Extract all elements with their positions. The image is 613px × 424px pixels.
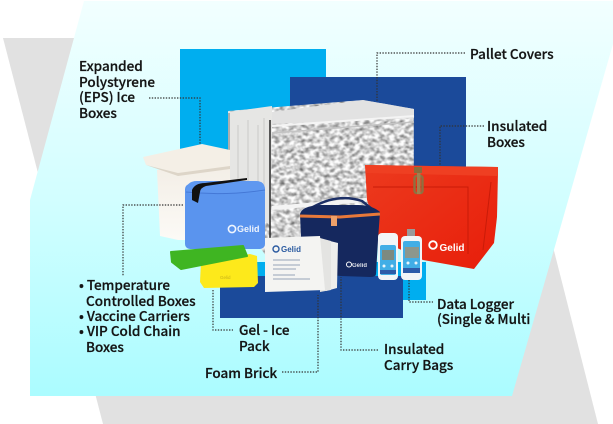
label: temperature controlled list: • VIP Cold Chain: [79, 320, 181, 340]
label: data logger: Data Logger: [437, 293, 514, 313]
icon: data loggers: [378, 229, 422, 280]
leader: carry bags: [341, 277, 378, 350]
label: insulated boxes: Boxes: [487, 131, 525, 151]
leader: EPS: [149, 98, 200, 144]
leader: insulated boxes: [440, 126, 484, 165]
icon: blue temperature controlled box: [185, 178, 265, 249]
icon: insulated carry bag: [300, 198, 380, 277]
label: insulated carry bags: Insulated: [384, 338, 444, 358]
label: temperature controlled list: • Vaccine Carriers: [79, 305, 190, 325]
icon: gel ice packs: [265, 236, 338, 292]
label: foam brick: Foam Brick: [205, 362, 277, 382]
icon: yellow foam brick: [200, 254, 258, 288]
icon: yellow foam brick: Gelid: [220, 275, 231, 280]
label: gel ice pack: Pack: [239, 335, 270, 355]
label: temperature controlled list: Boxes: [86, 336, 124, 356]
label: EPS ice boxes: Expanded: [79, 55, 143, 75]
icon: red insulated box: Gelid: [440, 243, 465, 254]
leader: foam brick: [282, 295, 318, 372]
icon: green gel pack: [171, 246, 247, 269]
icon: blue temperature controlled box: Gelid: [237, 224, 260, 234]
backing blocks: blue squares: [180, 49, 466, 318]
label: data logger: (Single & Multi: [437, 308, 530, 328]
leader: data logger: [409, 280, 433, 302]
label: temperature controlled list: • Temperature: [79, 274, 170, 294]
label: EPS ice boxes: Polystyrene: [79, 71, 155, 91]
label: EPS ice boxes: Boxes: [79, 102, 117, 122]
icon: red insulated box: [365, 165, 498, 269]
leader: temperature controlled: [123, 205, 183, 276]
label: insulated carry bags: Carry Bags: [384, 354, 453, 374]
label: EPS ice boxes: (EPS) Ice: [79, 86, 135, 106]
icon: gel ice packs: Gelid: [281, 245, 301, 254]
icon: insulated carry bag: Gelid: [352, 263, 367, 269]
label: temperature controlled list: Controlled Boxes: [86, 290, 196, 310]
leader: gel ice pack: [213, 290, 233, 330]
label: pallet covers: Pallet Covers: [470, 43, 554, 63]
icon: silver pallet cover: [228, 100, 414, 262]
icon: EPS ice box: [143, 144, 230, 240]
leader: pallet covers: [377, 53, 465, 102]
label: insulated boxes: Insulated: [487, 115, 547, 135]
label: gel ice pack: Gel - Ice: [239, 319, 290, 339]
